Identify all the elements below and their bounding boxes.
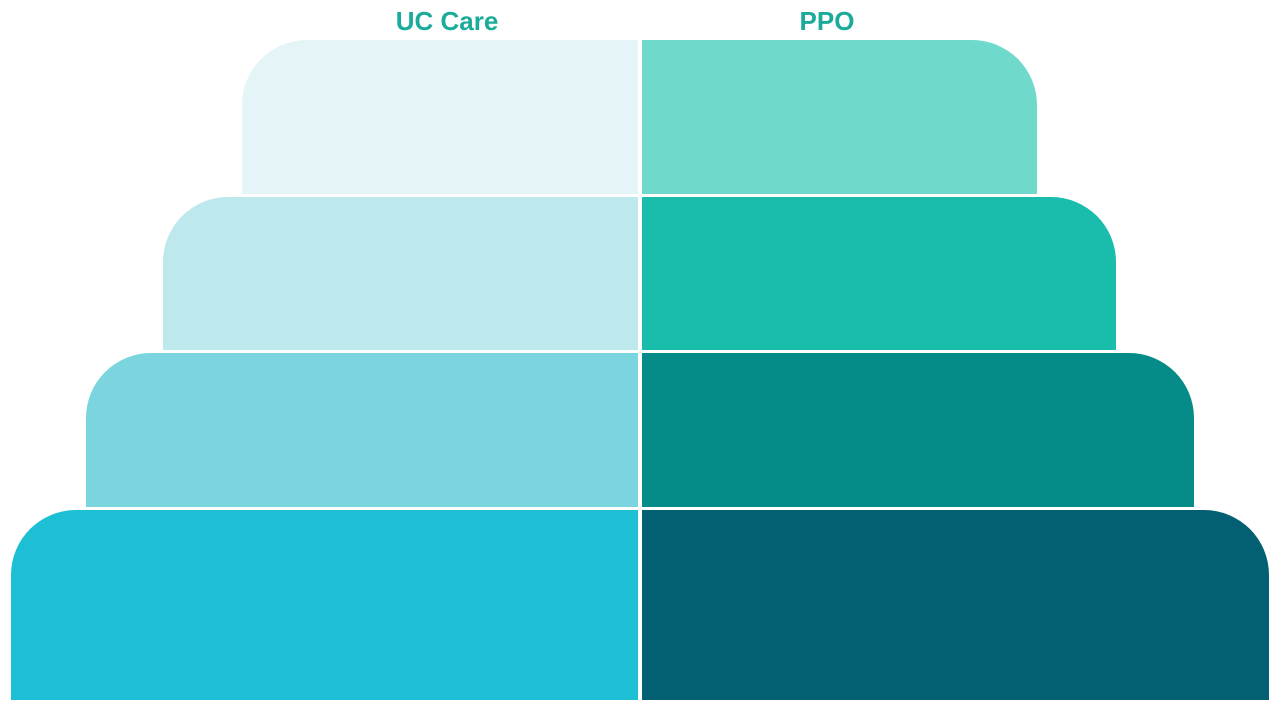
tier 2 UC Care — [163, 197, 638, 350]
tier 1 UC Care — [242, 40, 638, 194]
tier 4 UC Care — [11, 510, 638, 700]
tier 4 PPO — [642, 510, 1269, 700]
tier 2 PPO — [642, 197, 1116, 350]
tier 3 UC Care — [86, 353, 638, 507]
tier 3 PPO — [642, 353, 1194, 507]
heading: UC Care: UC Care — [396, 6, 498, 36]
heading: PPO: PPO — [800, 6, 854, 36]
tier 1 PPO — [642, 40, 1037, 194]
